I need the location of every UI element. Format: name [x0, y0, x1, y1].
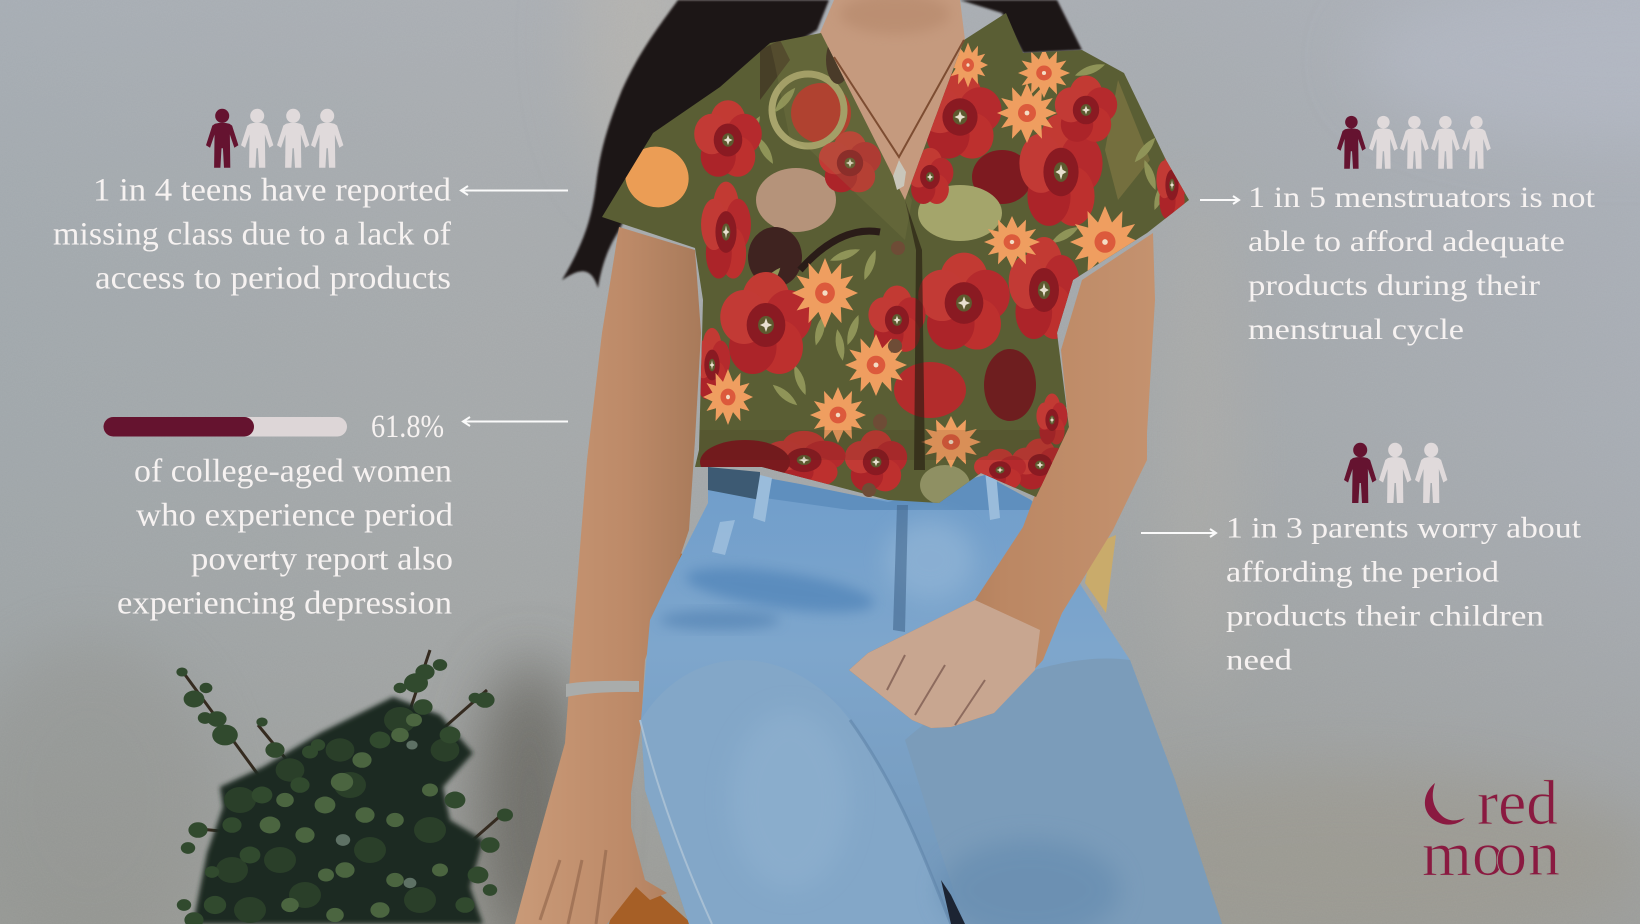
- percent value: 61.8%: [371, 409, 444, 445]
- text: teens missing class: missing class due to a lack of: [53, 216, 451, 252]
- floral shirt: [602, 13, 1189, 505]
- text: unable to afford products: menstrual cycle: [1248, 313, 1464, 346]
- left arm: [515, 227, 701, 924]
- text: teens missing class: access to period products: [95, 260, 451, 296]
- text: parents worry: [1226, 512, 1582, 676]
- text: depression: who experience period: [136, 498, 454, 534]
- progress bar: [104, 417, 347, 436]
- text: depression: of college-aged women: [134, 454, 452, 490]
- text: depression: [117, 454, 454, 622]
- icon: four people, one highlighted: [206, 109, 343, 168]
- shirt paisleys: [615, 36, 1150, 505]
- text: depression: experiencing depression: [117, 586, 452, 622]
- text: parents worry: products their children: [1226, 600, 1544, 632]
- logo: red moon: [1422, 767, 1560, 889]
- necklace: [834, 40, 964, 190]
- text: unable to afford products: 1 in 5 menstruators is not: [1248, 181, 1596, 214]
- text: unable to afford products: able to afford adequate: [1248, 225, 1565, 258]
- arrow pointing right: [1141, 529, 1216, 537]
- text: teens missing class: [53, 172, 452, 296]
- text: unable to afford products: products during their: [1248, 269, 1540, 302]
- arrow pointing right: [1200, 196, 1239, 204]
- stat: 1 in 3 parents: [1141, 443, 1582, 676]
- hair: [562, 0, 1082, 288]
- wordmark: moon: [1422, 818, 1560, 889]
- shirt red flowers: [694, 72, 1188, 491]
- plant: [176, 650, 513, 924]
- text: unable to afford products: [1248, 181, 1596, 346]
- jeans: [640, 467, 1222, 924]
- icon: three people, one highlighted: [1344, 443, 1447, 503]
- text: depression: poverty report also: [191, 542, 453, 578]
- stat: 61.8 percent: [104, 409, 568, 622]
- icon: crescent: [1425, 783, 1465, 825]
- right arm and hand: [849, 233, 1155, 728]
- text: parents worry: affording the period: [1226, 556, 1499, 588]
- icon: five people, one highlighted: [1337, 116, 1491, 169]
- stat: 1 in 4 teens: [53, 109, 568, 296]
- bracelet: [566, 681, 639, 697]
- neck and chest skin: [820, 0, 965, 205]
- shirt leaves: [741, 61, 1169, 436]
- shadow on wall behind plant: [475, 660, 585, 924]
- text: parents worry: need: [1226, 644, 1292, 676]
- stat: 1 in 5 menstruators: [1200, 116, 1596, 346]
- wordmark: [1422, 767, 1560, 889]
- text: teens missing class: 1 in 4 teens have reported: [93, 172, 452, 208]
- shirt buttons: [862, 241, 905, 497]
- shirt orange flowers: [703, 42, 1140, 468]
- arrow pointing left: [461, 186, 568, 195]
- chair: [609, 535, 1116, 924]
- arrow pointing left: [463, 417, 568, 426]
- wordmark: red: [1477, 767, 1558, 838]
- text: parents worry: 1 in 3 parents worry about: [1226, 512, 1582, 544]
